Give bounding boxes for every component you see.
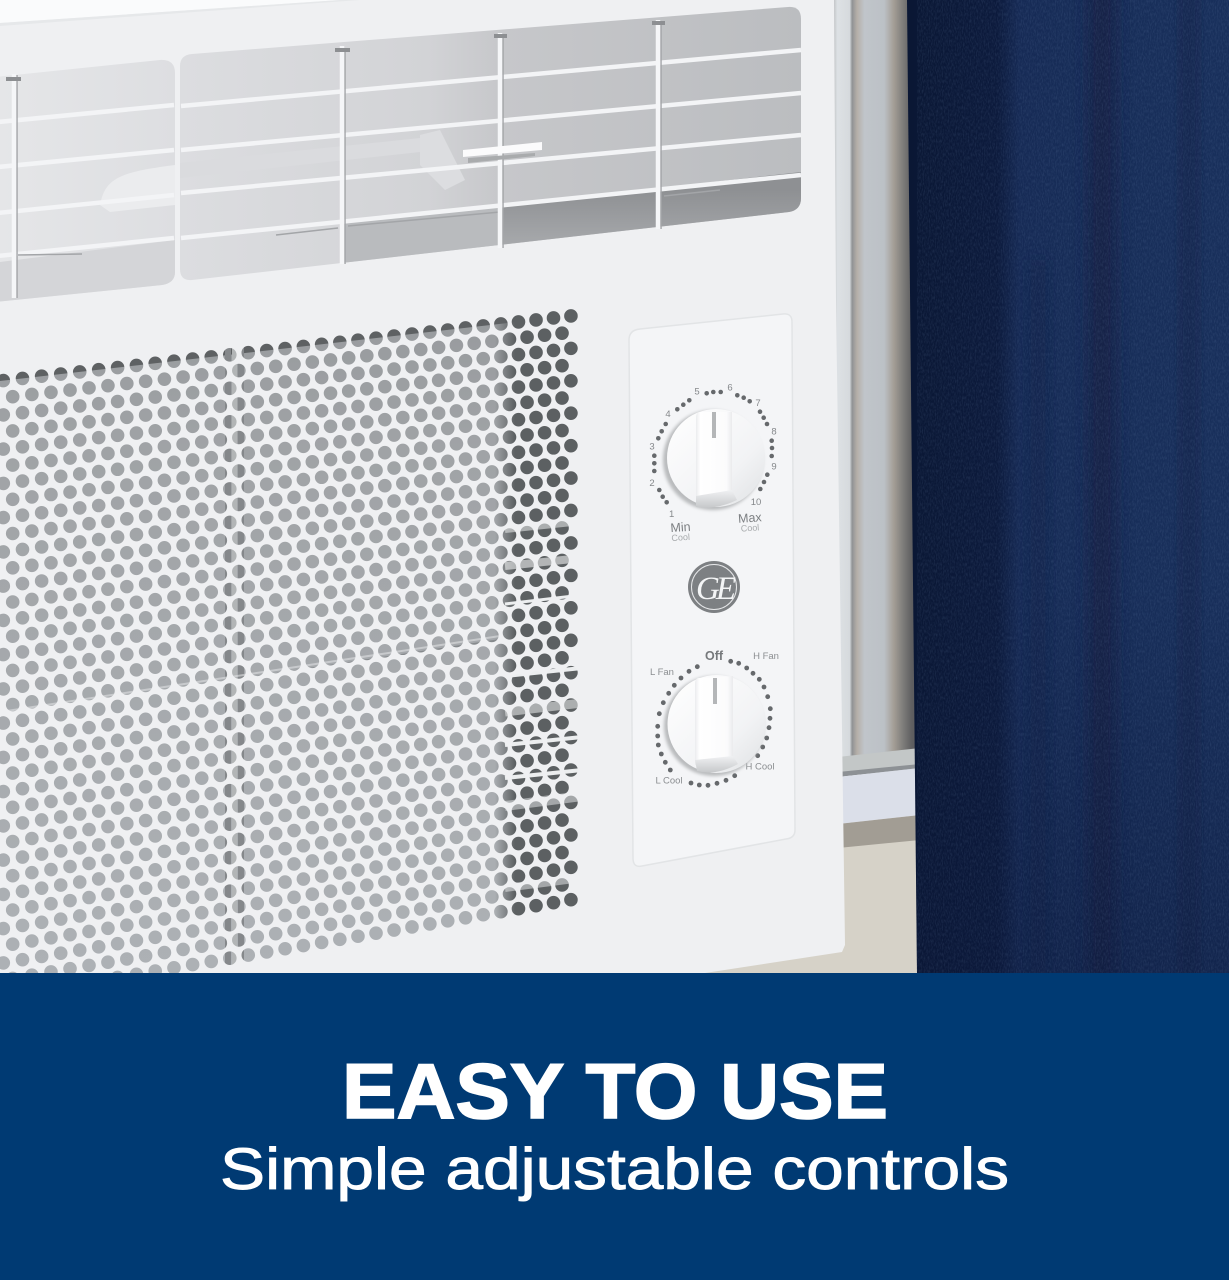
cooling dial: 2 xyxy=(649,478,655,489)
fan mode dial xyxy=(650,649,779,788)
fan mode dial: Off xyxy=(705,649,724,663)
air conditioner body xyxy=(0,0,845,973)
GE logo xyxy=(688,561,740,613)
cooling dial: Min xyxy=(670,520,691,535)
cooling dial: 9 xyxy=(771,462,777,472)
right air vent xyxy=(180,7,801,280)
cooling dial: Max xyxy=(738,510,763,526)
fan mode dial: H Fan xyxy=(753,651,779,662)
cooling dial: 6 xyxy=(727,382,733,394)
cooling dial: 4 xyxy=(665,409,671,420)
navy curtain xyxy=(907,0,1229,990)
louver slider xyxy=(463,142,542,163)
cooling dial: 1 xyxy=(669,509,674,520)
control panel xyxy=(629,314,795,866)
window frame and wall behind the unit xyxy=(700,0,930,975)
cooling dial: 3 xyxy=(649,442,655,452)
left air vent xyxy=(0,60,175,302)
cooling dial: 5 xyxy=(694,386,700,398)
cooling dial: 8 xyxy=(771,426,777,438)
fan mode dial: H Cool xyxy=(745,762,775,772)
cooling dial: 7 xyxy=(755,398,761,409)
cooling dial: 10 xyxy=(751,497,761,508)
cooling dial: Cool xyxy=(740,522,760,534)
cooling dial xyxy=(649,382,777,543)
heading: EASY TO USE xyxy=(342,1047,888,1135)
perforated front panel xyxy=(0,309,578,973)
subheading: Simple adjustable controls xyxy=(220,1137,1009,1202)
front wire grille xyxy=(0,20,801,298)
fan mode dial: L Fan xyxy=(650,667,674,678)
cooling dial: Cool xyxy=(671,532,690,543)
fan mode dial: L Cool xyxy=(655,776,683,786)
GE logo: GE xyxy=(696,571,736,607)
banner background xyxy=(0,973,1229,1280)
